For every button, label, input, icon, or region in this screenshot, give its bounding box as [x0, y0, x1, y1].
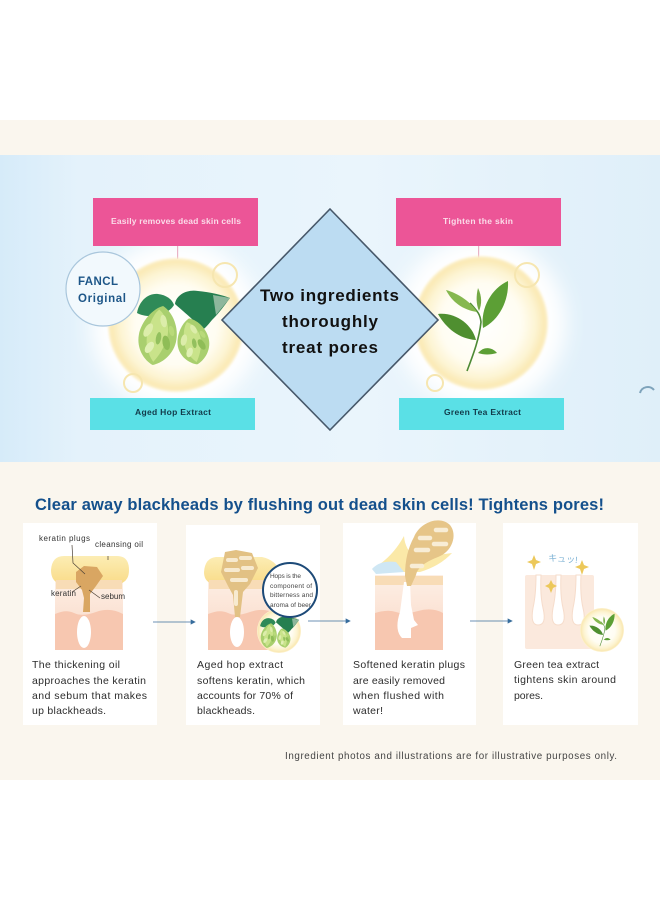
label: cleansing oil: cleansing oil — [95, 540, 143, 549]
label: キュッ!: キュッ! — [548, 553, 578, 565]
callout: Tighten the skin — [396, 198, 561, 246]
arrow 1 — [153, 620, 195, 624]
sparkles — [527, 555, 589, 593]
step 2 text — [197, 659, 305, 717]
illustration: keratin flushed out — [372, 520, 454, 650]
center diamond — [222, 209, 438, 430]
step 1 text — [32, 659, 147, 717]
callout: Tighten the skin: Tighten the skin — [443, 216, 513, 226]
label: sebum: sebum — [101, 592, 125, 601]
oil droplet with tea — [580, 608, 624, 652]
step 1 text: up blackheads. — [32, 705, 106, 717]
icon: water ring — [640, 387, 654, 393]
panel: step 1 — [23, 523, 157, 725]
callout: hops note — [263, 563, 317, 617]
connector: left — [177, 246, 178, 259]
step 3 text: when flushed with — [352, 690, 444, 702]
label: keratin plugs: keratin plugs — [39, 534, 90, 543]
label: keratin: keratin — [51, 589, 76, 598]
badge: FANCL Original: FANCL — [78, 276, 118, 288]
illustration: softened keratin — [204, 550, 317, 653]
icon: tea sprig — [438, 281, 508, 371]
label: Green Tea Extract: Green Tea Extract — [444, 407, 521, 417]
label: Green Tea Extract — [399, 398, 564, 430]
step 1 text: The thickening oil — [32, 659, 120, 671]
illustration: skin with blackhead — [39, 534, 143, 650]
callout: hops note: Hops is the — [270, 573, 301, 580]
step 2 text: blackheads. — [197, 705, 255, 717]
callout: Easily removes dead skin cells: Easily removes dead skin cells — [111, 216, 241, 226]
illustration: tightened pores — [525, 553, 624, 652]
icon: hops — [134, 291, 230, 368]
center diamond: thoroughly — [282, 312, 379, 331]
step 2 text: softens keratin, which — [197, 675, 305, 687]
callout: hops note: aroma of beer — [270, 602, 312, 609]
step 4 text: Green tea extract — [514, 659, 599, 671]
badge: FANCL Original — [66, 252, 140, 326]
connector: right — [478, 246, 479, 259]
center diamond: treat pores — [282, 338, 378, 357]
step 2 text: accounts for 70% of — [197, 690, 293, 702]
step 3 text: water! — [352, 705, 383, 717]
blue water background — [0, 155, 660, 462]
page background: cream — [0, 120, 660, 780]
step 4 text: pores. — [514, 690, 543, 702]
callout: hops note: bitterness and — [270, 592, 313, 599]
step 1 text: and sebum that makes — [32, 690, 147, 702]
panel: step 3 — [343, 520, 476, 725]
step 2 text: Aged hop extract — [197, 659, 283, 671]
step 3 text: are easily removed — [353, 675, 445, 687]
panel: ingredients — [0, 155, 660, 462]
oil droplet with hops — [257, 609, 301, 653]
heading: Clear away blackheads by flushing out dead skin cells! Tightens pores! — [35, 496, 604, 514]
badge: FANCL Original: Original — [78, 293, 126, 305]
step 3 text — [352, 659, 465, 717]
oil droplet: right — [414, 256, 548, 391]
arrow 3 — [470, 619, 512, 623]
step 4 text — [514, 659, 616, 702]
step 1 text: approaches the keratin — [32, 675, 146, 687]
center diamond: Two ingredients — [260, 286, 399, 305]
callout: hops note: component of — [270, 583, 312, 590]
oil droplet: left — [108, 258, 244, 392]
step 4 text: tightens skin around — [514, 674, 616, 686]
step 3 text: Softened keratin plugs — [353, 659, 465, 671]
callout: Easily removes dead skin cells — [93, 198, 258, 246]
label: Aged Hop Extract: Aged Hop Extract — [135, 407, 211, 417]
footnote: Ingredient photos and illustrations are for illustrative purposes only. — [285, 751, 617, 762]
panel: step 2 — [186, 525, 320, 725]
arrow 2 — [308, 619, 350, 623]
panel: step 4 — [503, 523, 638, 725]
label: Aged Hop Extract — [90, 398, 255, 430]
